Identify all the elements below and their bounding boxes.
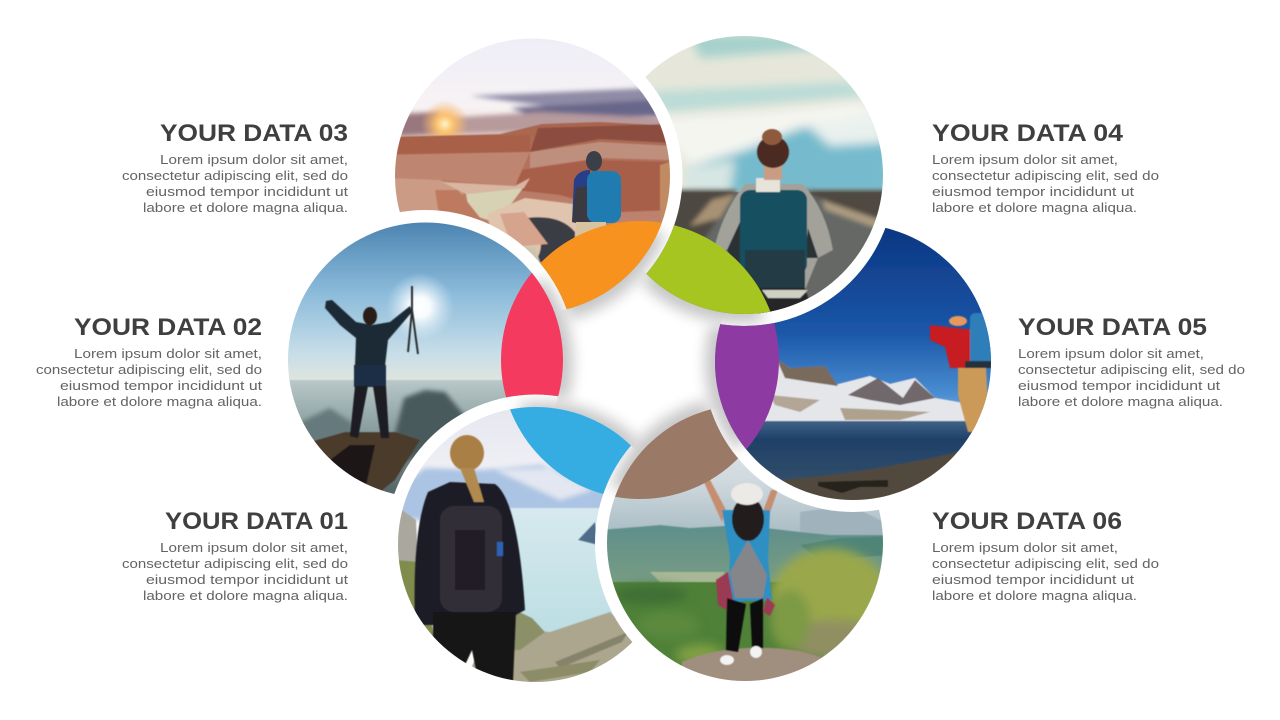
text block: data 01 [122, 508, 348, 603]
petal: purple (data 05) [715, 323, 779, 450]
hiker figure in circle 06 [703, 478, 778, 665]
text block: data 05: labore et dolore magna aliqua. [1018, 394, 1223, 409]
text block: data 02: eiusmod tempor incididunt ut [60, 378, 262, 393]
text block: data 06: consectetur adipiscing elit, sed do [932, 556, 1159, 571]
petal: brown (data 06) [615, 409, 738, 499]
text block: data 03: eiusmod tempor incididunt ut [146, 184, 348, 199]
text block: data 04: Lorem ipsum dolor sit amet, [932, 152, 1118, 167]
text block: data 02 [36, 314, 262, 409]
text block: data 02: labore et dolore magna aliqua. [57, 394, 262, 409]
text block: data 06: YOUR DATA 06 [932, 508, 1122, 535]
text block: data 02: consectetur adipiscing elit, sed do [36, 362, 262, 377]
photo circle 01: hiker looking over a fjord [398, 410, 632, 682]
hiker figure in circle 01 [415, 435, 525, 690]
photo circle 03: canyon at sunset [395, 38, 670, 310]
text block: data 04: consectetur adipiscing elit, sed do [932, 168, 1159, 183]
text block: data 03: Lorem ipsum dolor sit amet, [160, 152, 348, 167]
soft shadows cast by coloured petals toward the centre [515, 226, 768, 494]
text block: data 01: Lorem ipsum dolor sit amet, [160, 540, 348, 555]
hiker figure in circle 05 [930, 313, 995, 432]
text block: data 05: consectetur adipiscing elit, sed do [1018, 362, 1245, 377]
text block: data 03: consectetur adipiscing elit, sed do [122, 168, 348, 183]
hiker figure in circle 04 [713, 129, 833, 325]
text block: data 02: YOUR DATA 02 [74, 314, 262, 341]
text block: data 05: eiusmod tempor incididunt ut [1018, 378, 1220, 393]
text block: data 04: YOUR DATA 04 [932, 120, 1124, 147]
photo circle 02: hiker silhouette raising trekking poles at the sun [285, 220, 570, 500]
hiker figure in circle 03 [572, 151, 621, 242]
text block: data 04: labore et dolore magna aliqua. [932, 200, 1137, 215]
text block: data 03: labore et dolore magna aliqua. [143, 200, 348, 215]
text block: data 05: Lorem ipsum dolor sit amet, [1018, 346, 1204, 361]
text block: data 01: consectetur adipiscing elit, sed do [122, 556, 348, 571]
text block: data 01: labore et dolore magna aliqua. [143, 588, 348, 603]
petal: orange (data 03) [540, 221, 662, 310]
photo circle 06: hiker with arms raised over green valley [607, 446, 883, 681]
photo circle 04: hiker on a road [646, 36, 883, 314]
text block: data 04 [932, 120, 1159, 215]
text block: data 03: YOUR DATA 03 [160, 120, 348, 147]
text block: data 06: labore et dolore magna aliqua. [932, 588, 1137, 603]
petal: green (data 04) [646, 225, 770, 314]
text block: data 01: eiusmod tempor incididunt ut [146, 572, 348, 587]
text block: data 06: Lorem ipsum dolor sit amet, [932, 540, 1118, 555]
text block: data 05: YOUR DATA 05 [1018, 314, 1207, 341]
text block: data 01: YOUR DATA 01 [165, 508, 348, 535]
petal: blue (data 01) [510, 407, 631, 494]
text block: data 06 [932, 508, 1159, 603]
hiker figure in circle 02 [325, 286, 418, 438]
petal: pink (data 02) [501, 272, 563, 398]
photo circle 05: hiker photographing snowy mountains and lake [715, 228, 991, 500]
text block: data 06: eiusmod tempor incididunt ut [932, 572, 1134, 587]
text block: data 05 [1018, 314, 1245, 409]
text block: data 02: Lorem ipsum dolor sit amet, [74, 346, 262, 361]
text block: data 04: eiusmod tempor incididunt ut [932, 184, 1134, 199]
text block: data 03 [122, 120, 348, 215]
